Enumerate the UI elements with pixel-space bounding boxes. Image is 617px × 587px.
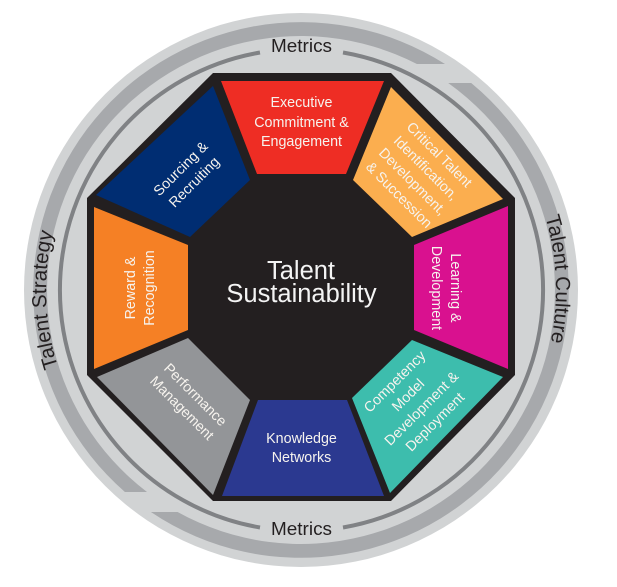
segment: competency model: Development & bbox=[382, 368, 463, 449]
segment: critical talent: Development, bbox=[375, 145, 449, 219]
label: talent strategy: Talent Strategy bbox=[32, 230, 56, 370]
segment: competency model: Deployment bbox=[403, 390, 468, 455]
segment: knowledge networks: Networks bbox=[272, 450, 331, 466]
segment: sourcing and recruiting bbox=[96, 86, 250, 237]
right band: talent culture arc bbox=[151, 83, 569, 558]
segment: reward and recognition: Recognition bbox=[142, 250, 158, 326]
segment: executive commitment: Executive bbox=[271, 95, 333, 111]
segment: executive commitment bbox=[221, 81, 384, 174]
segment: knowledge networks bbox=[222, 400, 384, 496]
segment: critical talent: & Succession bbox=[362, 159, 435, 232]
segment: executive commitment: Engagement bbox=[261, 134, 342, 150]
segment: competency model: Model bbox=[389, 376, 428, 415]
label: talent culture: Talent Culture bbox=[546, 214, 570, 342]
segment: learning and development bbox=[414, 206, 508, 369]
segment: reward and recognition: Reward & bbox=[123, 256, 139, 319]
segment: performance management: Management bbox=[146, 373, 217, 444]
segment: critical talent: Identification, bbox=[390, 133, 461, 204]
segment: sourcing and recruiting: Recruiting bbox=[166, 154, 223, 211]
label: metrics bottom: Metrics bbox=[271, 519, 332, 539]
segment: reward and recognition bbox=[94, 207, 188, 369]
segment: competency model: Competency bbox=[361, 348, 430, 416]
left band: talent strategy arc bbox=[33, 22, 445, 492]
segment: critical talent bbox=[353, 87, 503, 237]
segment: learning and development: Learning & bbox=[447, 253, 463, 323]
segment: critical talent: Critical Talent bbox=[403, 119, 475, 191]
segment: knowledge networks: Knowledge bbox=[266, 431, 337, 447]
centre title: Sustainability bbox=[226, 280, 377, 308]
segment: competency model bbox=[352, 340, 503, 493]
black octagon bbox=[87, 73, 515, 501]
label: metrics top: Metrics bbox=[271, 36, 332, 56]
segment: performance management bbox=[97, 338, 250, 495]
centre title: Talent bbox=[267, 257, 335, 285]
segment: learning and development: Development bbox=[428, 246, 444, 330]
segment: executive commitment: Commitment & bbox=[254, 115, 349, 131]
segment: sourcing and recruiting: Sourcing & bbox=[151, 138, 212, 200]
inner thin ring, broken at the metrics labels bbox=[60, 52, 543, 528]
segment: performance management: Performance bbox=[160, 361, 229, 430]
